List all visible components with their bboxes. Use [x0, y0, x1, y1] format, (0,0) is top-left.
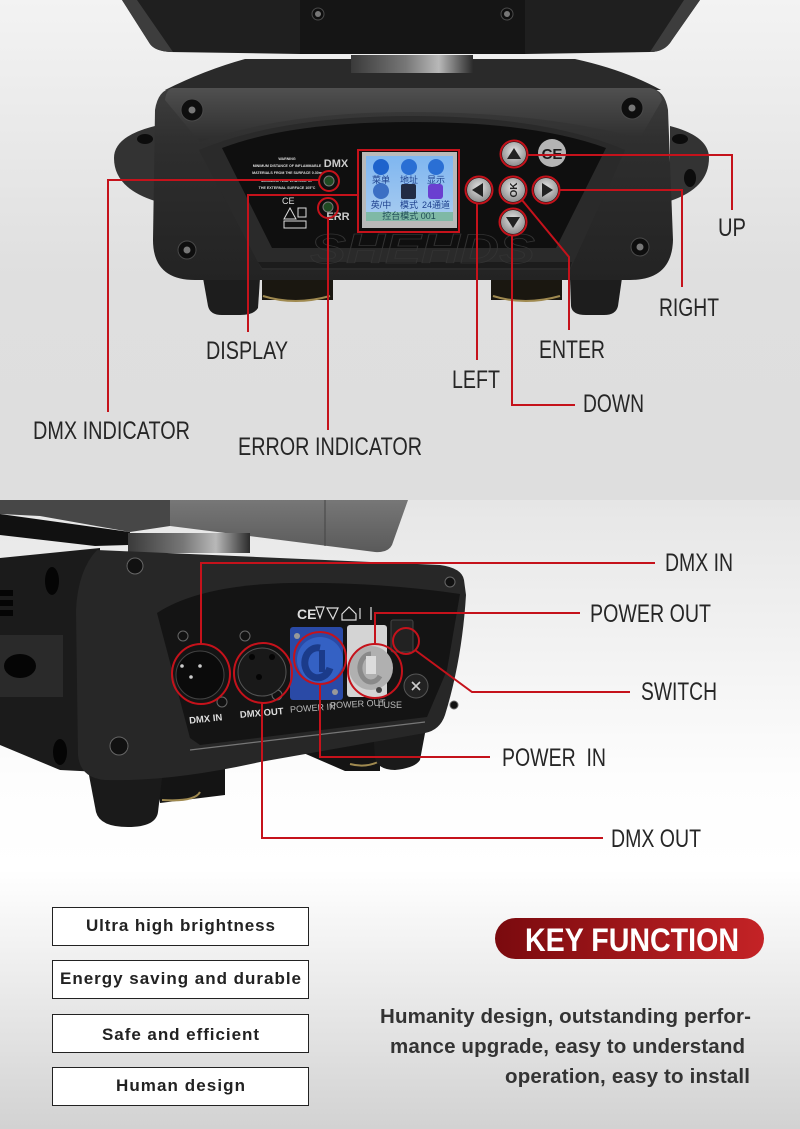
connector inset — [157, 583, 460, 745]
feature: energy saving: Energy saving and durable — [60, 969, 301, 988]
buttons — [467, 139, 566, 234]
callout lines: top fixture — [108, 140, 732, 430]
vents — [0, 567, 67, 765]
switch — [391, 620, 413, 652]
LCD display: 控台模式 001 — [382, 210, 436, 221]
callout labels: bottom fixture: DMX IN — [665, 549, 733, 577]
buttons: CE — [542, 146, 562, 163]
connector labels — [189, 698, 402, 727]
callout labels: bottom fixture — [502, 549, 733, 853]
callout labels: top fixture: LEFT — [452, 366, 500, 394]
handle details — [137, 134, 696, 187]
text block: description — [380, 1005, 751, 1088]
callout labels: top fixture: ENTER — [539, 336, 605, 364]
warning text: MAXIMUM TEMPERATURE OF — [261, 179, 314, 183]
callout labels: bottom fixture: POWER OUT — [590, 600, 711, 628]
fuse — [404, 674, 428, 698]
callout labels: bottom fixture: SWITCH — [641, 678, 717, 706]
callout labels: top fixture: RIGHT — [659, 294, 719, 322]
head underside — [0, 514, 130, 546]
text block: description: mance upgrade, easy to understand — [390, 1035, 745, 1058]
feature: energy saving — [52, 960, 308, 998]
LCD display — [362, 152, 457, 228]
warning text: MINIMUM DISTANCE OF INFLAMMABLE — [253, 164, 322, 168]
feet — [88, 728, 426, 827]
fixture handle right — [670, 126, 709, 201]
feature: human design — [52, 1068, 308, 1106]
indicator labels: DMX — [324, 158, 349, 170]
fixture head — [122, 0, 700, 54]
callout lines: bottom fixture — [172, 563, 655, 838]
warning text: MATERIALS FROM THE SURFACE 0.30m — [252, 171, 322, 175]
buttons: OK — [509, 182, 520, 198]
callout labels: top fixture: DMX INDICATOR — [33, 417, 190, 445]
marks row — [297, 606, 371, 622]
fixture feet — [203, 278, 622, 315]
control inset — [222, 122, 606, 248]
connector labels: DMX IN — [189, 712, 223, 727]
fixture body — [153, 88, 673, 280]
neck — [128, 533, 250, 553]
LCD display: 24通道 — [422, 199, 450, 210]
head gray panel — [170, 500, 408, 552]
text block: description: Humanity design, outstanding perfor- — [380, 1005, 751, 1028]
DMX OUT connector — [238, 648, 286, 696]
heading: key function: KEY FUNCTION — [525, 922, 739, 958]
warning text — [252, 157, 322, 190]
feature: ultra high brightness — [52, 908, 308, 946]
feature: safe and efficient — [52, 1014, 308, 1052]
fixture top plate — [165, 59, 661, 90]
panel: top fixture control side — [114, 0, 709, 315]
feature: safe and efficient: Safe and efficient — [102, 1025, 259, 1044]
connector labels: POWER OUT — [330, 698, 386, 710]
brackets — [155, 730, 380, 803]
indicators — [323, 176, 334, 212]
DMX IN connector — [176, 651, 224, 699]
POWER IN connector — [290, 627, 343, 700]
LCD display: 地址 — [400, 174, 418, 185]
approval marks — [284, 208, 306, 228]
background: middle section — [0, 500, 800, 870]
feature: ultra high brightness: Ultra high brightness — [86, 916, 275, 935]
warning text: WARNING — [278, 157, 296, 161]
fixture neck — [351, 55, 473, 73]
LCD display: 模式 — [400, 199, 418, 210]
feature: human design: Human design — [116, 1076, 245, 1095]
LCD display: 显示 — [427, 175, 445, 185]
CE small: CE — [282, 196, 295, 206]
LCD display: 菜单 — [372, 174, 390, 185]
background: top section — [0, 0, 800, 500]
callout labels: bottom fixture: DMX OUT — [611, 825, 701, 853]
head dark side — [0, 500, 170, 532]
watermark: SHEHDS — [310, 225, 535, 272]
callout labels: top fixture: DOWN — [583, 390, 644, 418]
connector labels: DMX OUT — [239, 706, 284, 721]
connector labels: POWER IN — [290, 701, 336, 715]
LCD display: 英/中 — [371, 199, 391, 210]
marks row: CE — [297, 606, 316, 622]
upper band — [165, 88, 662, 142]
callout labels: top fixture — [33, 214, 746, 461]
callout labels: top fixture: ERROR INDICATOR — [238, 433, 422, 461]
indicator labels — [324, 158, 350, 223]
background: bottom section — [0, 870, 800, 1129]
warning text: THE EXTERNAL SURFACE 105°C — [259, 186, 316, 190]
POWER OUT connector — [347, 625, 393, 697]
control inset frame — [199, 116, 625, 270]
callout labels: top fixture: UP — [718, 214, 746, 242]
head facets — [122, 0, 700, 52]
side housing — [0, 548, 100, 772]
screws — [110, 558, 458, 755]
fixture handle left — [114, 126, 155, 201]
callout labels: top fixture: DISPLAY — [206, 337, 288, 365]
text block: description: operation, easy to install — [505, 1065, 750, 1088]
body — [76, 550, 466, 780]
connector labels: FUSE — [378, 700, 402, 710]
callout labels: bottom fixture: POWER IN — [502, 744, 606, 772]
indicator labels: ERR — [326, 211, 350, 223]
screws — [178, 8, 649, 259]
panel: bottom fixture connector side — [0, 500, 466, 827]
